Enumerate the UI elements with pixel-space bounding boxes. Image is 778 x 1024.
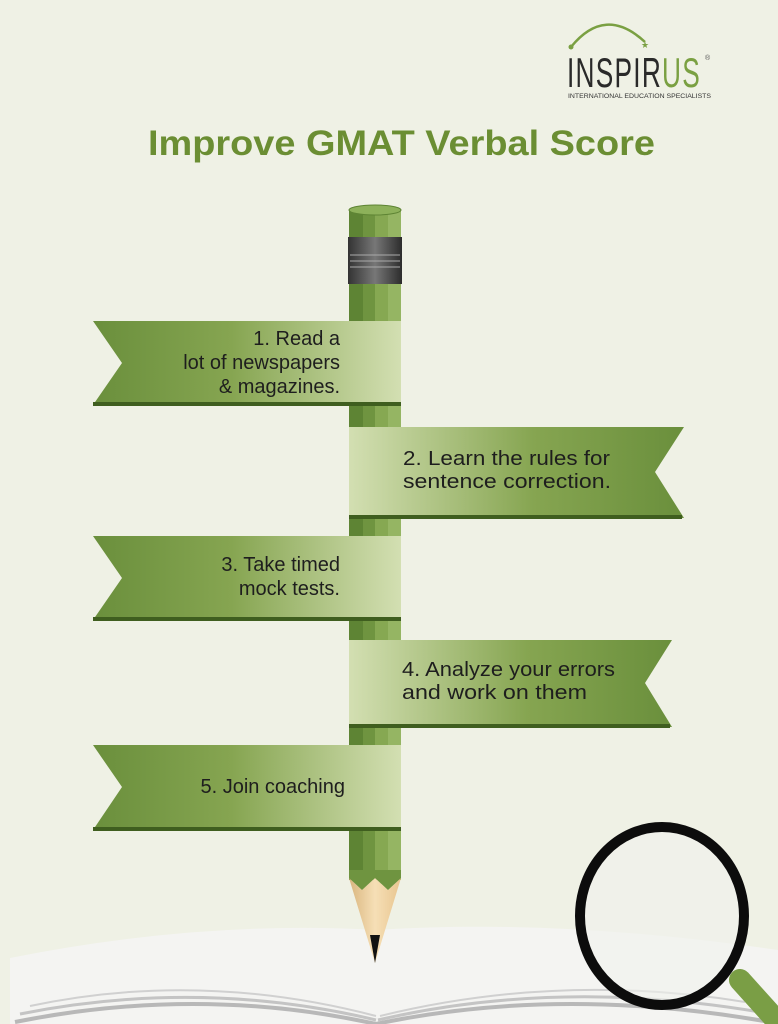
logo: ® <box>705 54 711 62</box>
book <box>10 927 778 1024</box>
banner 1: & magazines. <box>219 376 340 398</box>
logo: INTERNATIONAL EDUCATION SPECIALISTS <box>568 93 711 100</box>
logo: INSPIRUS <box>567 49 701 96</box>
banner 5 <box>93 745 401 831</box>
banner 4 <box>349 640 672 728</box>
banner 1 <box>93 321 401 406</box>
banner 1: 1. Read a <box>253 328 341 350</box>
magnifying glass <box>580 827 778 1024</box>
banner 2: sentence correction. <box>403 471 611 493</box>
banner 4: 4. Analyze your errors <box>402 659 615 681</box>
pencil <box>348 205 402 963</box>
title: Improve GMAT Verbal Score <box>148 124 655 163</box>
banner 4: and work on them <box>402 682 587 704</box>
banner 3: 3. Take timed <box>221 554 340 576</box>
logo: ★ <box>641 40 649 50</box>
banner 3: mock tests. <box>239 578 340 600</box>
banner 2 <box>349 427 684 519</box>
banner 3 <box>93 536 401 621</box>
banner 1: lot of newspapers <box>183 352 340 374</box>
banner 5: 5. Join coaching <box>200 776 345 798</box>
logo <box>567 25 711 100</box>
banner 2: 2. Learn the rules for <box>403 448 610 470</box>
